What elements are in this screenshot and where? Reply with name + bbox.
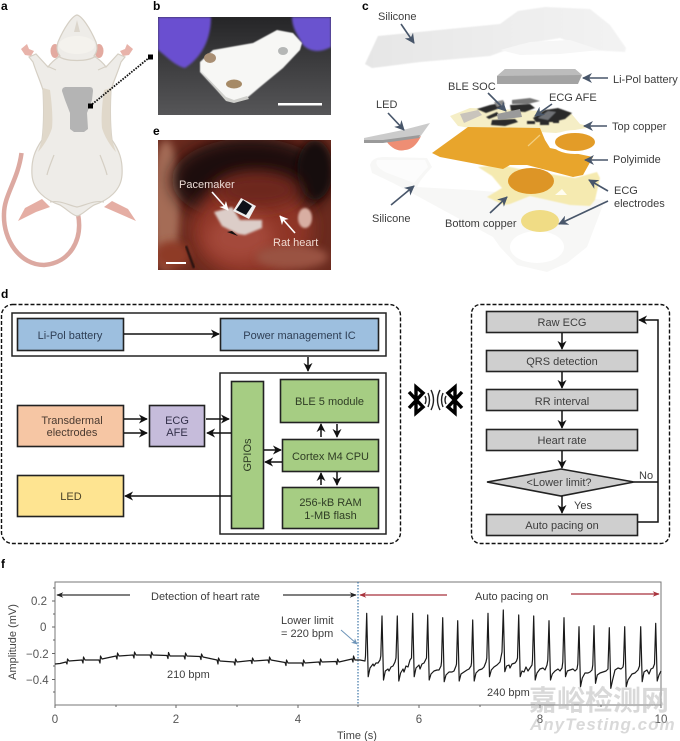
transdermal electrodes block: electrodes bbox=[47, 427, 98, 439]
RAM and flash block: 256-kB RAM bbox=[299, 497, 362, 509]
QRS detection step: QRS detection bbox=[526, 356, 598, 368]
top copper label: Top copper bbox=[612, 121, 667, 133]
x axis labels: 6 bbox=[416, 714, 422, 726]
RR interval step bbox=[486, 390, 638, 410]
ECG AFE block bbox=[150, 406, 204, 446]
flow arrows bbox=[562, 320, 658, 522]
y axis title: Amplitude (mV) bbox=[7, 604, 19, 680]
watermark bbox=[529, 685, 676, 734]
auto pacing span: Auto pacing on bbox=[475, 591, 548, 603]
silicone lower label: Silicone bbox=[372, 213, 411, 225]
detection of heart rate span: Detection of heart rate bbox=[151, 591, 260, 603]
heart rate step bbox=[486, 430, 638, 450]
lower limit annotation bbox=[281, 615, 357, 644]
x axis labels: 4 bbox=[295, 714, 302, 726]
panel d: hardware block diagram bbox=[2, 304, 400, 544]
lower limit annotation: = 220 bpm bbox=[281, 628, 333, 640]
no label: No bbox=[639, 470, 653, 482]
label d: d bbox=[1, 287, 8, 301]
axis ticks bbox=[52, 588, 661, 708]
y axis labels: 0 bbox=[40, 622, 46, 634]
LED layer bbox=[385, 136, 421, 151]
x axis labels: 2 bbox=[173, 714, 179, 726]
lower limit annotation: Lower limit bbox=[281, 615, 334, 627]
Cortex M4 CPU block: Cortex M4 CPU bbox=[292, 451, 369, 463]
RAM and flash block bbox=[282, 488, 378, 528]
panel d: pacing algorithm flowchart bbox=[472, 304, 670, 544]
polyimide layer bbox=[432, 127, 593, 177]
Raw ECG step: Raw ECG bbox=[538, 317, 586, 329]
BLE SOC chip bbox=[497, 109, 522, 120]
Cortex M4 CPU block bbox=[282, 440, 378, 472]
ECG AFE block: AFE bbox=[166, 427, 188, 439]
ECG electrode pad bbox=[521, 210, 559, 232]
feet bbox=[18, 199, 136, 221]
heart rate step: Heart rate bbox=[538, 435, 586, 447]
LED label: LED bbox=[376, 99, 397, 111]
dashed frame bbox=[2, 304, 400, 544]
power management IC block: Power management IC bbox=[243, 330, 356, 342]
LED block bbox=[18, 476, 124, 516]
y axis labels bbox=[26, 596, 49, 687]
panel e: pacemaker on rat heart photograph bbox=[158, 140, 331, 270]
Li-Pol battery label: Li-Pol battery bbox=[613, 74, 678, 86]
silicone label: Silicone bbox=[378, 11, 417, 23]
label e: e bbox=[153, 124, 160, 138]
yes label: Yes bbox=[574, 500, 592, 512]
bottom copper label: Bottom copper bbox=[445, 218, 517, 230]
auto pacing step bbox=[486, 514, 638, 536]
ears bbox=[50, 44, 60, 58]
pacemaker bbox=[214, 207, 262, 235]
plot frame bbox=[55, 582, 661, 705]
BLE 5 module block bbox=[280, 380, 378, 422]
LED block: LED bbox=[60, 491, 82, 503]
BLE 5 module block: BLE 5 module bbox=[295, 396, 364, 408]
panel f: ECG amplitude chart: 240 bpm bbox=[487, 687, 530, 699]
BLE SOC label: BLE SOC bbox=[448, 81, 496, 93]
scale bar bbox=[278, 103, 322, 106]
Li-Pol battery block: Li-Pol battery bbox=[38, 330, 103, 342]
bottom silicone layer bbox=[370, 157, 606, 272]
lower limit decision: <Lower limit? bbox=[526, 477, 592, 489]
top silicone layer bbox=[365, 7, 626, 68]
polyimide label: Polyimide bbox=[613, 154, 661, 166]
QRS detection step bbox=[486, 350, 638, 372]
lower limit decision bbox=[487, 469, 634, 496]
rat heart label: Rat heart bbox=[273, 237, 318, 249]
dashed frame bbox=[472, 304, 670, 544]
ECG trace bbox=[55, 610, 661, 688]
gloves bbox=[158, 17, 211, 68]
bottom copper bbox=[478, 165, 600, 206]
x axis labels: 0 bbox=[52, 714, 58, 726]
Raw ECG step bbox=[486, 312, 638, 332]
transdermal electrodes block: Transdermal bbox=[41, 415, 103, 427]
x axis labels: 8 bbox=[537, 714, 543, 726]
panel c: exploded device view bbox=[364, 7, 678, 272]
RR interval step: RR interval bbox=[535, 396, 589, 408]
heart rate labels: 210 bpm bbox=[167, 669, 210, 681]
watermark: 嘉峪检测网 bbox=[529, 685, 669, 716]
body bbox=[29, 15, 125, 216]
paws bbox=[21, 44, 133, 56]
lower polyimide disc bbox=[508, 168, 554, 194]
x axis labels: 10 bbox=[655, 714, 667, 726]
pacemaker label: Pacemaker bbox=[179, 179, 235, 191]
lower limit marker bbox=[357, 582, 359, 705]
flank shading bbox=[38, 88, 116, 152]
ECG AFE label: ECG AFE bbox=[549, 92, 597, 104]
panel f: ECG amplitude chart bbox=[7, 582, 667, 741]
dotted connector bbox=[88, 54, 153, 108]
y axis labels: 0.2 bbox=[31, 596, 47, 608]
power management IC block bbox=[220, 318, 378, 350]
ECG AFE block: ECG bbox=[165, 415, 189, 427]
Li-Pol battery bbox=[497, 69, 582, 84]
ECG electrodes label: ECG bbox=[614, 185, 638, 197]
x axis labels bbox=[52, 714, 667, 726]
power group frame bbox=[12, 313, 386, 356]
transdermal electrodes block bbox=[18, 406, 124, 446]
GPIOs block bbox=[232, 382, 264, 528]
watermark: AnyTesting.com bbox=[529, 715, 676, 734]
Li-Pol battery block bbox=[18, 318, 124, 350]
implanted device bbox=[62, 87, 93, 132]
tail bbox=[4, 153, 79, 265]
y axis labels: −0.2 bbox=[26, 649, 49, 661]
scale bar bbox=[166, 262, 186, 264]
chips bbox=[477, 98, 572, 126]
GPIOs block: GPIOs bbox=[242, 438, 254, 472]
upper electrode disc bbox=[551, 130, 599, 154]
panel a: rat illustration bbox=[4, 15, 153, 265]
RAM and flash block: 1-MB flash bbox=[304, 510, 357, 522]
MCU group frame bbox=[220, 373, 386, 534]
y axis labels: −0.4 bbox=[26, 675, 49, 687]
white device bbox=[200, 30, 302, 102]
connecting arrows bbox=[124, 334, 337, 496]
head markings bbox=[59, 36, 95, 54]
icon: bluetooth link bbox=[409, 387, 462, 413]
panel c: exploded device view: electrodes bbox=[614, 198, 665, 210]
label f: f bbox=[1, 557, 6, 571]
auto pacing step: Auto pacing on bbox=[525, 520, 599, 532]
top copper traces bbox=[450, 108, 592, 133]
panel b: device photograph bbox=[158, 17, 331, 115]
